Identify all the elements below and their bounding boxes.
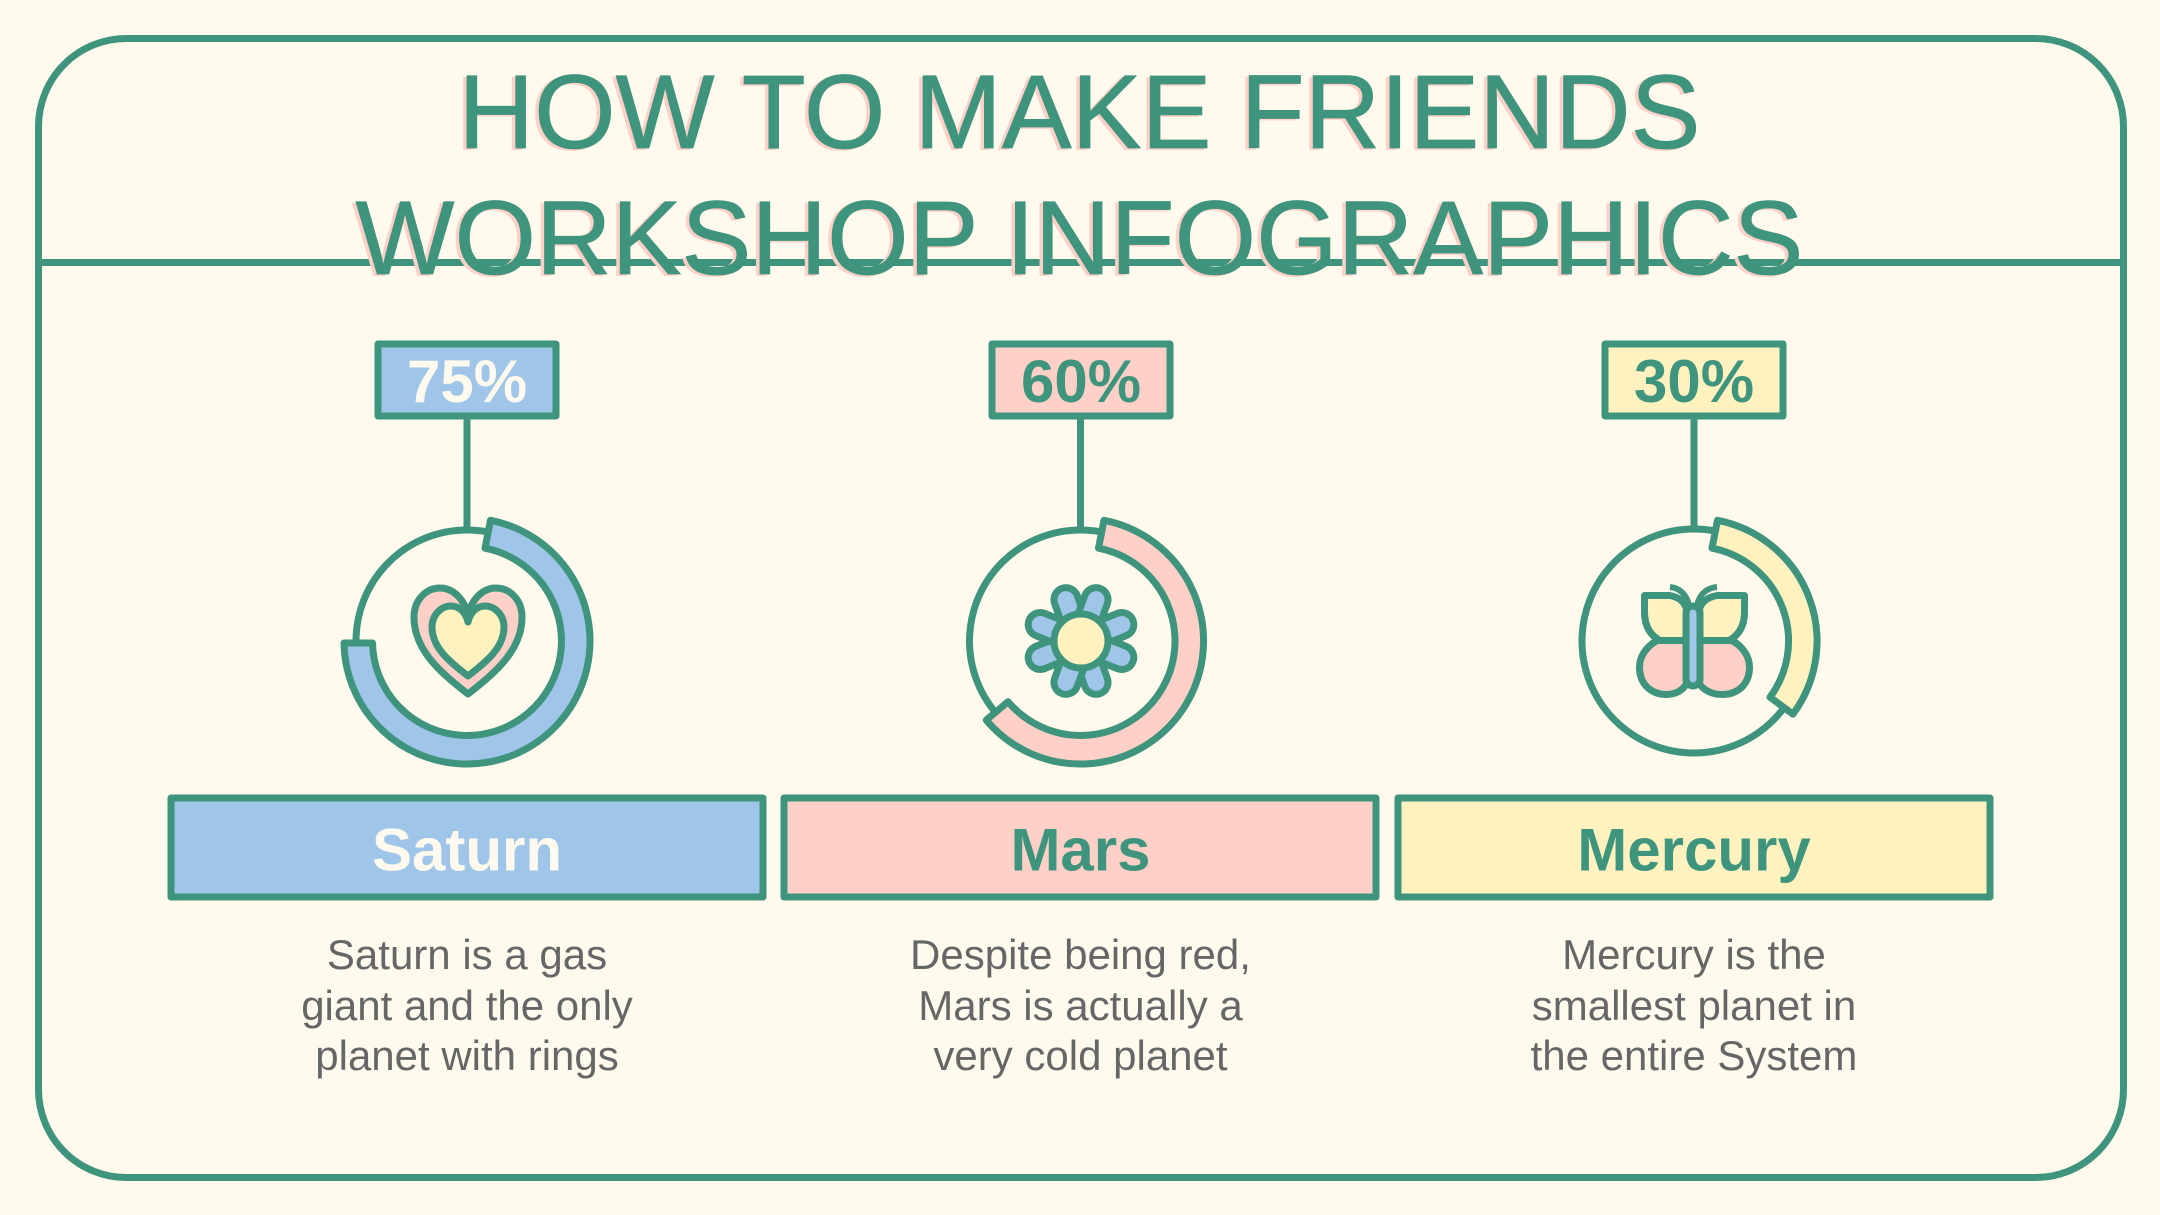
Saturn name bar: Saturn [372,816,562,884]
panel: Mars [784,344,1376,1079]
Mars description: very cold planet [933,1032,1228,1079]
Mercury description: smallest planet in [1532,982,1856,1029]
icon: butterfly [1640,587,1750,694]
Mercury percentage tag: 30% [1634,348,1754,415]
title [352,54,1803,298]
icon: heart [414,588,522,694]
Mercury percentage tag [1605,344,1783,416]
Mercury progress ring [1582,520,1817,753]
panel: Mercury [1398,344,1990,1079]
Mercury connector [1690,416,1698,530]
title: WORKSHOP INFOGRAPHICS [356,180,1803,297]
icon: flower [1025,584,1137,698]
Mercury description: Mercury is the [1562,931,1826,978]
Saturn connector [464,416,470,530]
Mars percentage tag [992,344,1170,416]
panel: Saturn [171,344,763,1079]
Mercury description [1531,931,1857,1079]
Mars description: Mars is actually a [918,982,1243,1029]
Mars description [910,931,1251,1079]
title: HOW TO MAKE FRIENDS [455,56,1697,172]
Mercury description: the entire System [1531,1032,1857,1079]
Mars name bar: Mars [1010,816,1151,884]
Saturn description: Saturn is a gas [327,931,607,978]
Mars description: Despite being red, [910,931,1251,978]
Saturn progress ring [344,520,590,764]
title: WORKSHOP INFOGRAPHICS [352,182,1800,298]
Saturn description: planet with rings [315,1032,619,1079]
Saturn description: giant and the only [301,982,633,1029]
Mars connector [1077,416,1084,530]
title: HOW TO MAKE FRIENDS [458,54,1701,171]
Mars name bar [784,798,1376,897]
Saturn description [301,931,633,1079]
Saturn percentage tag [378,344,556,416]
Saturn name bar [171,798,763,897]
Mars percentage tag: 60% [1021,348,1141,415]
header divider [38,259,2124,266]
Mercury name bar [1398,798,1990,897]
Saturn percentage tag: 75% [407,348,527,415]
Mars progress ring [970,520,1204,764]
Mercury name bar: Mercury [1577,816,1811,884]
